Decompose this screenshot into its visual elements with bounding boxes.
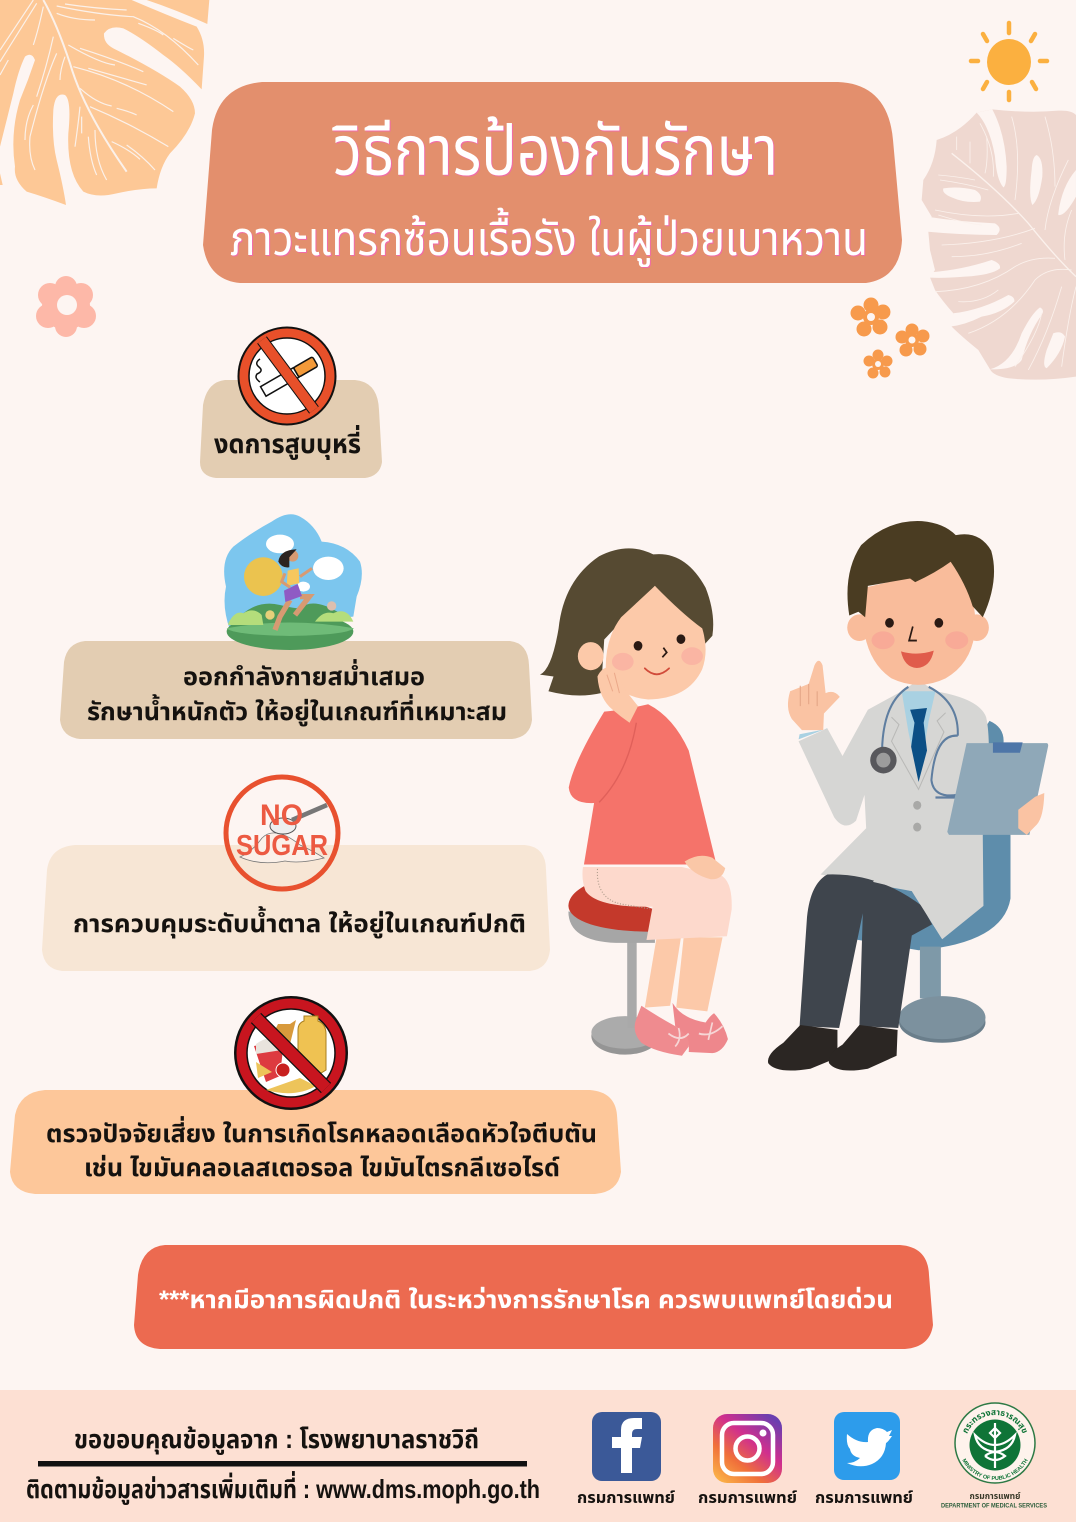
logo: ministry of public health: กรมการแพทย์: [970, 1491, 1021, 1501]
text: exercise line 1: ออกกำลังกายสม่ำเสมอ: [183, 659, 425, 691]
heading: main title: วิธีการป้องกันรักษา: [332, 112, 778, 190]
text: social labels: กรมการแพทย์: [698, 1490, 797, 1507]
logo: ministry of public health: [941, 1402, 1047, 1510]
icon: no sugar sign: SUGAR: [236, 830, 328, 862]
text: risk line 2: เช่น ไขมันคลอเลสเตอรอล ไขมันไตรกลีเซอไรด์: [84, 1154, 560, 1182]
footer band: [0, 1390, 1076, 1522]
text: social labels: กรมการแพทย์: [577, 1490, 675, 1507]
icon: pink flower: [36, 276, 96, 337]
illustration: patient and doctor: [540, 521, 1048, 1071]
logo: ministry of public health: DEPARTMENT OF MEDICAL SERVICES: [941, 1504, 1047, 1510]
decoration: orange monstera leaf: [0, 0, 209, 205]
text: risk line 1: ตรวจปัจจัยเสี่ยง ในการเกิดโรคหลอดเลือดหัวใจตีบตัน: [46, 1116, 597, 1148]
title panel: [203, 82, 902, 283]
text: sugar control: การควบคุมระดับน้ำตาล ให้อยู่ในเกณฑ์ปกติ: [73, 906, 526, 939]
text: warning: ***หากมีอาการผิดปกติ ในระหว่างการรักษาโรค ควรพบแพทย์โดยด่วน: [159, 1286, 893, 1314]
logo: ministry of public health: กระทรวงสาธารณสุข: [964, 1410, 1027, 1434]
text: no smoking: งดการสูบบุหรี่: [214, 425, 361, 460]
icon: instagram: [713, 1414, 782, 1483]
panel: risk check: [10, 1090, 621, 1194]
icon: no fatty food sign: [234, 996, 348, 1110]
icon: facebook: [592, 1412, 661, 1481]
icon: runner illustration: [224, 514, 362, 650]
text: social labels: [577, 1490, 913, 1507]
text: exercise line 2: รักษาน้ำหนักตัว ให้อยู่ในเกณฑ์ที่เหมาะสม: [87, 694, 507, 727]
decoration: pink monstera leaf: [922, 109, 1076, 380]
text: follow: ติดตามข้อมูลข่าวสารเพิ่มเติมที่ : www.dms.moph.go.th: [26, 1471, 540, 1505]
icon: sun: [971, 23, 1047, 100]
illustration: patient: [540, 548, 732, 1056]
text: thanks: ขอขอบคุณข้อมูลจาก : โรงพยาบาลราชวิถี: [74, 1424, 479, 1455]
icon: twitter: [834, 1412, 900, 1480]
icon: no sugar sign: NO: [260, 799, 303, 832]
panel: exercise: [60, 641, 532, 739]
illustration: doctor: [768, 521, 1048, 1071]
icon: orange flowers: [850, 298, 930, 378]
icon: no sugar sign: [226, 777, 338, 889]
icon: no smoking sign: [238, 326, 336, 426]
panel: sugar control: [42, 845, 550, 971]
heading: subtitle: ภาวะแทรกซ้อนเรื้อรัง ในผู้ป่วยเบาหวาน: [230, 207, 868, 267]
logo: ministry of public health: MINISTRY OF PUBLIC HEALTH: [962, 1458, 1028, 1480]
panel: no smoking: [200, 380, 382, 478]
text: social labels: กรมการแพทย์: [815, 1490, 913, 1507]
panel: warning banner: [134, 1245, 933, 1349]
